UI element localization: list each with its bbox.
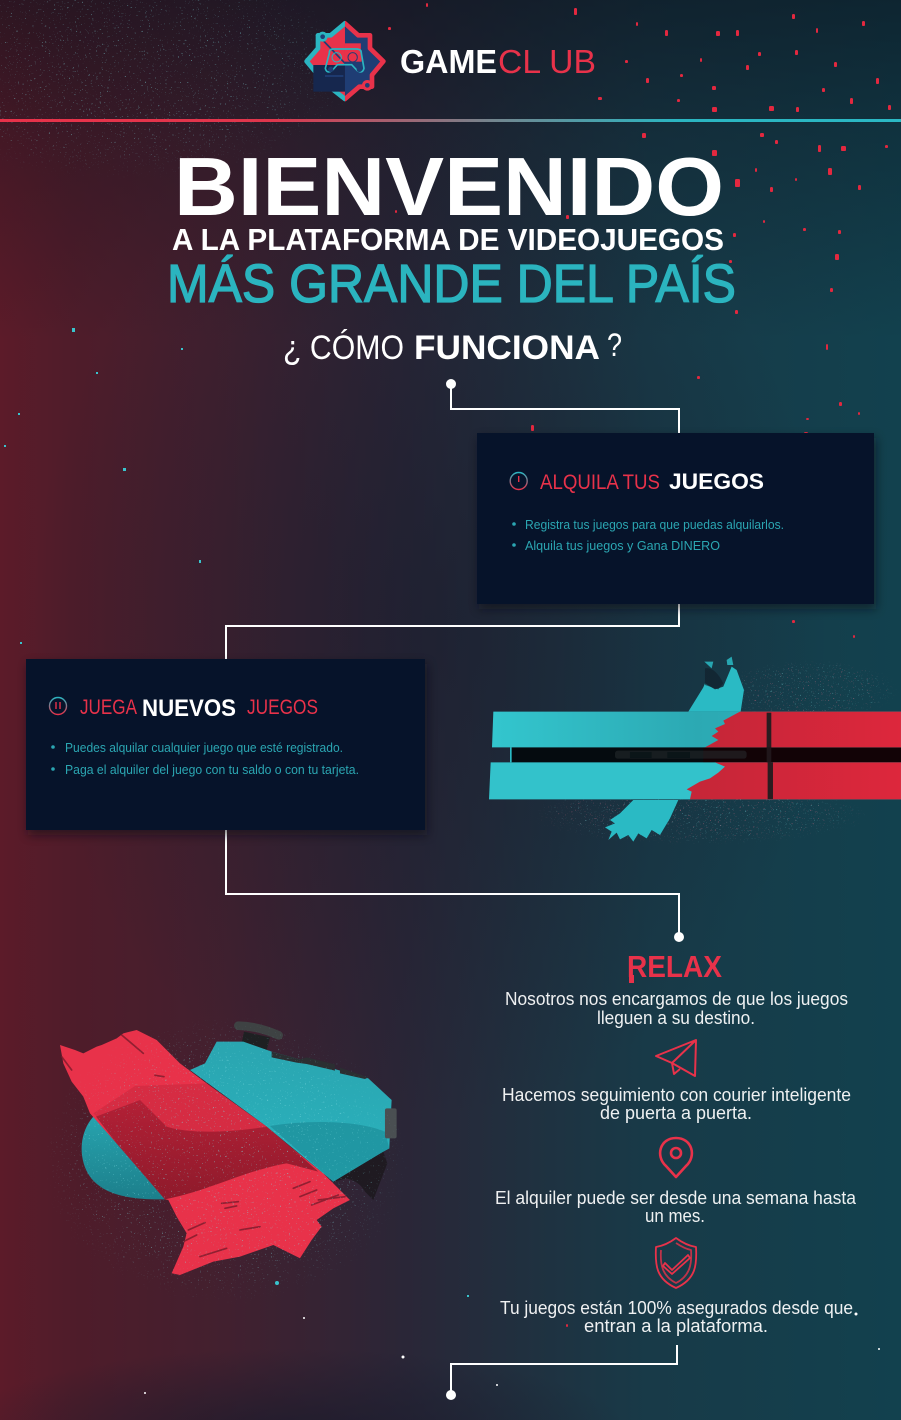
brush dry marks [62, 1035, 345, 1257]
title: A LA PLATAFORMA DE VIDEOJUEGOS [172, 222, 724, 257]
thumbstick [238, 1026, 279, 1050]
text block: seguimiento: de puerta a puerta. [600, 1103, 752, 1123]
red brush stroke [60, 1030, 350, 1275]
text block: seguimiento: Hacemos seguimiento con courier inteligente [502, 1085, 851, 1105]
dust over controller [47, 1020, 402, 1300]
panel heading: NUEVOS [142, 695, 236, 722]
text block: asegurados: Tu juegos están 100% asegurados desde que [500, 1298, 853, 1318]
trigger shadow [333, 1152, 387, 1200]
controller left lobe [82, 1117, 165, 1199]
text block: destino [505, 989, 848, 1028]
icon: pause ring [50, 698, 66, 714]
text block: asegurados [500, 1298, 853, 1336]
logo: GameClub [307, 23, 596, 99]
icon: alert ring [510, 472, 527, 490]
text block: seguimiento [502, 1085, 851, 1123]
bullet list: Puedes alquilar cualquier juego que esté registrado. [65, 740, 343, 755]
red paint splatter [388, 3, 891, 1327]
logo wordmark: GAME [400, 43, 497, 80]
upper brush stroke [688, 667, 744, 712]
section: relax [495, 949, 857, 1336]
connector lines [226, 384, 679, 1395]
top buttons [272, 1052, 368, 1079]
bullet list: Alquila tus juegos y Gana DINERO [525, 538, 720, 553]
bullet list: Paga el alquiler del juego con tu saldo o con tu tarjeta. [65, 762, 359, 777]
darker body under paint [96, 1100, 318, 1199]
lower brush stroke [605, 800, 678, 842]
subtitle: como funciona [283, 327, 622, 367]
console divider [767, 713, 771, 748]
title: MÁS GRANDE DEL PAÍS [167, 254, 736, 314]
logo emblem [307, 23, 383, 99]
connector dots [446, 379, 684, 1400]
console ports [615, 751, 747, 759]
text block: destino: Nosotros nos encargamos de que los juegos [505, 989, 848, 1009]
bullet list [51, 740, 359, 777]
teal and white specks [4, 328, 880, 1394]
subtitle: como funciona: ? [607, 327, 622, 363]
panel heading [80, 695, 318, 722]
panel heading: JUEGA [80, 696, 137, 719]
subtitle: como funciona: ¿ CÓMO [283, 329, 404, 367]
bullet list [512, 517, 784, 553]
title [167, 140, 736, 314]
text block: destino: lleguen a su destino. [597, 1008, 755, 1028]
bullet list: Registra tus juegos para que puedas alquilarlos. [525, 517, 784, 532]
icon: map pin [660, 1138, 692, 1177]
title: BIENVENIDO [174, 140, 724, 233]
dust texture [0, 0, 894, 844]
panel heading [540, 469, 764, 494]
text block: alquiler [495, 1188, 857, 1226]
console bottom plate [489, 762, 901, 799]
upper shell under paint [93, 1083, 267, 1132]
icon: paper plane [656, 1040, 696, 1076]
heading: relax: RELAX [627, 949, 722, 984]
logo: GameClub: CL UB [498, 43, 596, 80]
subtitle: como funciona: FUNCIONA [414, 329, 600, 367]
red paint on bottom plate [687, 762, 901, 799]
text block: alquiler: El alquiler puede ser desde una semana hasta [495, 1188, 857, 1208]
illustration: console with paint [489, 657, 901, 842]
header rule [0, 119, 901, 122]
side button [385, 1108, 397, 1138]
console top plate [492, 712, 901, 747]
console slot [510, 747, 901, 762]
panel: alquila tus juegos [477, 433, 876, 609]
red paint on top plate [705, 712, 901, 747]
text block: asegurados: entran a la plataforma. [584, 1316, 768, 1336]
lower shell shading [270, 1122, 389, 1182]
illustration: controller with paint [60, 1026, 397, 1275]
panel heading: ALQUILA TUS [540, 471, 660, 494]
panel heading: JUEGOS [669, 469, 764, 494]
icon: shield check [656, 1238, 696, 1288]
text block: alquiler: un mes. [645, 1206, 705, 1226]
panel heading: JUEGOS [247, 696, 318, 719]
panel: juega nuevos juegos [26, 659, 427, 835]
controller body [190, 1042, 392, 1182]
